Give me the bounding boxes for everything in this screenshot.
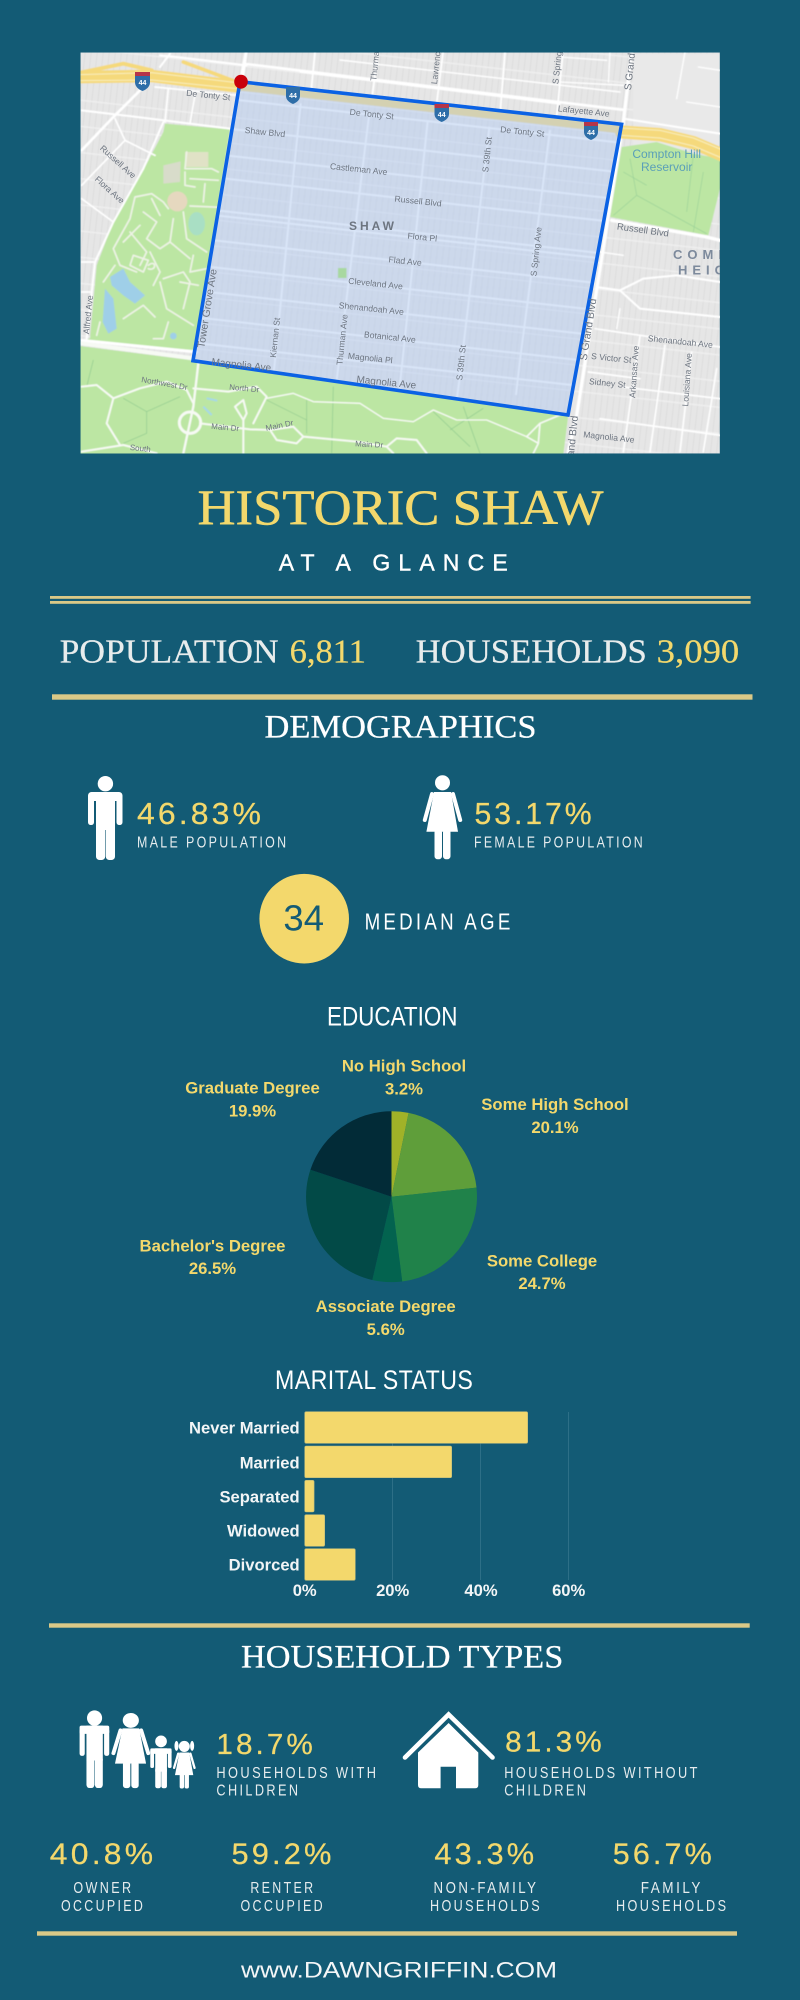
icon: family	[80, 1710, 195, 1788]
double divider	[50, 596, 751, 604]
stat: family households: 56.7%	[613, 1838, 715, 1871]
bar chart: marital status: Divorced	[229, 1555, 300, 1574]
map: street labels: Alfred Ave	[81, 295, 95, 335]
pie label: no high school	[342, 1057, 466, 1098]
heading: household types: HOUSEHOLD TYPES	[241, 1640, 563, 1676]
map: street labels: S Grand Blvd	[578, 298, 599, 361]
female percentage: 53.17%	[474, 796, 594, 831]
households with children label: CHILDREN	[216, 1782, 300, 1799]
households without children label	[504, 1765, 700, 1799]
pie label: no high school: 3.2%	[385, 1079, 423, 1098]
map: street labels: Magnolia Ave	[583, 429, 635, 445]
icon: male figure	[88, 776, 122, 860]
households without children label: HOUSEHOLDS WITHOUT	[504, 1765, 700, 1782]
map: street labels: Flad Ave	[388, 254, 422, 268]
pie chart: education	[306, 1111, 477, 1282]
stat: owner occupied: 40.8%	[50, 1838, 156, 1871]
map: interstate shields: 44	[289, 93, 297, 100]
stat: renter occupied: RENTER	[250, 1880, 315, 1897]
map: eastern streets	[560, 52, 720, 452]
map: interstate east	[622, 128, 723, 159]
map: street labels: S Victor St	[591, 351, 633, 365]
map: highlighted neighbourhood overlay	[193, 82, 622, 415]
stat: renter occupied: OCCUPIED	[240, 1898, 325, 1915]
map: interstate shields: 44	[438, 112, 446, 119]
map: street labels: Flora Ave	[93, 174, 127, 206]
pie label: some college: 24.7%	[518, 1274, 566, 1293]
map: street labels: Kiernan St	[268, 317, 282, 358]
population and households: 3,090	[657, 634, 739, 671]
map: park dot	[338, 268, 346, 278]
map: street labels: Lafayette Ave	[557, 103, 610, 119]
map: compton hill reservoir	[610, 142, 720, 235]
stat: owner occupied: OCCUPIED	[61, 1898, 145, 1915]
map: street labels: Arkansas Ave	[627, 345, 641, 398]
map: street labels: S Spring Ave	[528, 226, 544, 277]
population and households: HOUSEHOLDS	[416, 634, 647, 671]
map: street labels	[83, 52, 720, 454]
map: street labels: De Tonty St	[349, 107, 395, 121]
pie label: bachelor's degree: 26.5%	[189, 1259, 236, 1278]
population and households: 6,811	[290, 634, 366, 671]
footer website: www.DAWNGRIFFIN.COM	[240, 1957, 557, 1982]
stat: non-family households: HOUSEHOLDS	[430, 1898, 542, 1915]
households without children label: CHILDREN	[504, 1782, 588, 1799]
pie label: associate degree: Associate Degree	[316, 1297, 456, 1316]
stat: non-family households: NON-FAMILY	[434, 1880, 538, 1897]
subtitle: AT A GLANCE	[279, 550, 508, 576]
map: street labels: Main Dr	[211, 422, 240, 433]
map: neighbourhood streets	[198, 100, 616, 397]
map: street labels: Tower Grove Ave	[195, 268, 220, 349]
map: street labels: South	[129, 443, 151, 454]
stat: owner occupied: OWNER	[73, 1880, 133, 1897]
map: street labels: Shenandoah Ave	[647, 333, 714, 350]
map: interstate west	[80, 62, 237, 89]
heading: demographics: DEMOGRAPHICS	[264, 710, 536, 746]
map: street labels: Thurman Ave	[334, 314, 350, 366]
map: street labels: Russell Ave	[98, 143, 138, 181]
map: street labels: Flora Pl	[407, 230, 438, 244]
map: street labels: Magnolia Ave	[211, 357, 272, 374]
stat: family households	[613, 1838, 728, 1915]
map: street labels: Northwest Dr	[141, 375, 189, 392]
bar chart: marital status: 60%	[552, 1581, 586, 1600]
bar chart: marital status: 0%	[293, 1581, 317, 1600]
map: street labels: Main Dr	[265, 418, 294, 433]
map: outer north and west streets	[240, 52, 624, 116]
map: street labels: Botanical Ave	[364, 329, 416, 345]
bar chart: marital status: Separated	[219, 1488, 300, 1507]
map: street labels: Louisiana Ave	[680, 353, 694, 407]
map: street labels: Sidney St	[588, 376, 627, 390]
households with children label	[216, 1765, 378, 1799]
bar chart: marital status: Widowed	[227, 1521, 300, 1540]
map: boundary of Shaw	[193, 82, 622, 415]
map: street labels: De Tonty St	[500, 124, 545, 139]
bar chart: marital status: Married	[240, 1453, 300, 1472]
map: street labels: S Spring	[550, 51, 564, 85]
map: street labels: Shenandoah Ave	[338, 300, 405, 317]
map: interstate shields	[135, 72, 598, 140]
pie label: no high school: No High School	[342, 1057, 466, 1076]
map: street labels: Magnolia Pl	[347, 351, 393, 365]
pie label: some high school: Some High School	[481, 1095, 629, 1114]
pie label: graduate degree: 19.9%	[229, 1101, 276, 1120]
pie label: some college: Some College	[487, 1251, 597, 1270]
pie label: graduate degree	[185, 1078, 320, 1120]
pie label: some high school	[481, 1095, 629, 1137]
map: interstate shields: 44	[139, 80, 146, 87]
map: street labels: Reservoir	[641, 160, 692, 174]
bar chart: marital status: Never Married	[189, 1418, 300, 1437]
map: street labels: Shaw Blvd	[244, 125, 286, 139]
male label: MALE POPULATION	[137, 834, 288, 851]
map: street labels: S 39th St	[480, 136, 494, 173]
map: south park	[80, 346, 568, 455]
map: street labels: Magnolia Ave	[356, 374, 417, 392]
title: HISTORIC SHAW	[198, 479, 604, 535]
bar chart: marital status	[189, 1412, 586, 1600]
stat: family households: FAMILY	[641, 1880, 703, 1897]
stat: renter occupied	[232, 1838, 334, 1915]
map: street labels: Compton Hill	[632, 147, 701, 161]
map: street labels: North Dr	[229, 383, 260, 394]
pie label: some college	[487, 1251, 597, 1293]
population and households	[60, 634, 739, 671]
pie label: bachelor's degree: Bachelor's Degree	[140, 1236, 285, 1255]
stat: non-family households: 43.3%	[434, 1838, 537, 1871]
map: street labels: Russell Blvd	[394, 194, 442, 208]
map: street labels: S Grand	[623, 53, 638, 91]
map: street labels: Cleveland Ave	[348, 276, 404, 291]
map: start marker	[234, 75, 248, 89]
map: street labels: Lawrence	[429, 46, 443, 85]
median age badge: 34	[283, 898, 324, 939]
map: street labels: SHAW	[349, 219, 397, 233]
pie label: some high school: 20.1%	[531, 1118, 579, 1137]
map: street labels: S 39th St	[454, 344, 468, 381]
map: interstate through Shaw	[240, 86, 622, 129]
stat: non-family households	[430, 1838, 542, 1915]
pie label: graduate degree: Graduate Degree	[185, 1078, 320, 1097]
median age label: MEDIAN AGE	[365, 908, 514, 934]
map: street labels: De Tonty St	[186, 88, 231, 102]
heading: education: EDUCATION	[327, 1002, 458, 1032]
pie label: associate degree	[316, 1297, 456, 1339]
bar chart: marital status: 20%	[376, 1581, 410, 1600]
map of the Shaw neighbourhood	[80, 52, 723, 455]
map: botanical garden	[82, 124, 230, 350]
map: street labels: HEIGHTS	[678, 263, 771, 278]
female label: FEMALE POPULATION	[474, 834, 645, 851]
stat: owner occupied	[50, 1838, 156, 1915]
stat: renter occupied: 59.2%	[232, 1838, 334, 1871]
map: street labels: S Grand Blvd	[563, 415, 581, 478]
map: street labels: Thurman	[368, 46, 382, 81]
median age badge	[259, 874, 349, 964]
map: street labels: COMPTON	[673, 247, 774, 262]
map: street labels: Russell Blvd	[616, 221, 669, 240]
stat: family households: HOUSEHOLDS	[616, 1898, 728, 1915]
pie label: associate degree: 5.6%	[367, 1320, 405, 1339]
map: street labels: Castleman Ave	[330, 161, 388, 177]
households with children label: HOUSEHOLDS WITH	[216, 1765, 378, 1782]
heading: marital status: MARITAL STATUS	[275, 1365, 473, 1395]
pie label: bachelor's degree	[140, 1236, 285, 1278]
households without children percentage: 81.3%	[505, 1726, 605, 1758]
male percentage: 46.83%	[137, 796, 264, 831]
population and households: POPULATION	[60, 634, 279, 671]
map: interstate shields: 44	[587, 130, 595, 137]
map: western streets	[82, 52, 247, 352]
map: street labels: Main Dr	[355, 439, 384, 450]
bar chart: marital status: 40%	[464, 1581, 498, 1600]
icon: female figure	[425, 775, 460, 859]
icon: house	[405, 1714, 492, 1788]
households with children percentage: 18.7%	[216, 1729, 316, 1761]
